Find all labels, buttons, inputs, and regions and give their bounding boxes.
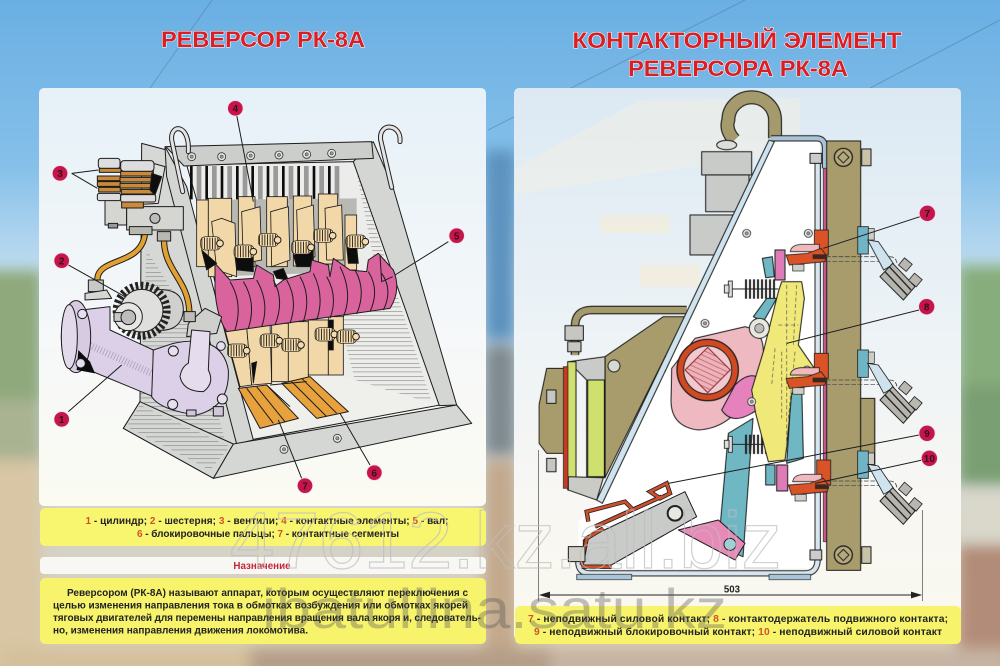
label 4: 4 [233,104,239,115]
label 6: 6 [372,468,378,479]
label 2 [54,253,69,268]
legend: reverser parts [40,508,486,546]
label 3: 3 [57,169,63,180]
label 7: 7 [302,481,308,492]
dimension: 503 [538,450,922,601]
heading: purpose: Назначение [233,561,291,572]
angled plate edge [597,140,774,503]
cable lugs [826,227,922,524]
title: contactor element: РЕВЕРСОРА РК-8А [628,56,848,81]
gear [114,286,183,335]
icon: right hook [380,127,400,187]
channel bracket [577,138,827,580]
text block: purpose description: но, изменения направления движения локомотива. [53,626,308,636]
olive mounting bar [810,141,875,570]
valves [97,158,183,241]
yellow contact holder [748,282,817,462]
label 5: 5 [454,231,460,242]
leader lines [68,115,448,478]
panel: contactor diagram background [514,88,961,640]
watermark: 47612.kz.all.biz: 47612.kz.all.biz [230,496,781,585]
label 7 [297,478,313,493]
label 2: 2 [59,256,65,267]
lower arm with blocking contact [568,483,745,567]
contact elements, lower row [225,317,359,387]
text block: purpose description: целью изменения направления тока в обмотках возбуждения или обмотках якорей [53,600,468,612]
label 7 [919,205,935,221]
contact elements, upper row [197,194,358,280]
shaft with cams [215,253,397,332]
text block: purpose description: Реверсором (РК-8А) называют аппарат, которым осуществляют переключения с [67,588,468,599]
icon: left hook [172,129,188,192]
label 9 [919,425,935,441]
label 4 [228,101,243,116]
blocking fingers [238,377,348,428]
cylinder [61,280,228,416]
label 3 [52,166,68,181]
label 7: 7 [925,209,931,220]
illustration: contactor element [538,97,937,601]
title: contactor element: КОНТАКТОРНЫЙ ЭЛЕМЕНТ [572,28,902,53]
label 10: 10 [924,454,935,465]
legend: contactor parts: 9 - неподвижный блокировочный контакт; 10 - неподвижный силовой контакт [534,626,942,638]
text block: purpose description [40,578,486,644]
spring lower [724,436,778,452]
pipes to valves [97,233,189,312]
dimension: 503: 503 [724,585,741,596]
label 5 [449,228,464,243]
leader lines [668,217,922,483]
legend: contactor parts [515,606,961,644]
label 8 [919,299,935,315]
frame: body of the apparatus [123,142,472,478]
contact springs [201,229,369,258]
gray blocks behind the plate [690,140,752,255]
fixed contacts [786,230,831,501]
label 1: 1 [59,415,65,426]
cam: pink segment and shaft ring [671,327,764,430]
title: contactor element [572,28,902,81]
spring upper [724,281,778,297]
plate rivets [701,229,812,327]
teal levers and contact plates [718,250,803,557]
label 9: 9 [924,429,930,440]
white mounting plate [578,142,820,570]
panel: reverser diagram background [39,88,486,506]
label 8: 8 [924,302,930,313]
legend: reverser parts: 1 - цилиндр; 2 - шестерня; 3 - вентили; 4 - контактные элементы; 5 - вал; [86,516,448,527]
label 10 [921,450,937,466]
label 1 [54,412,69,427]
legend: reverser parts: 6 - блокировочные пальцы; 7 - контактные сегменты [137,528,399,540]
title: reverser: РЕВЕРСОР РК-8А [161,27,365,52]
legend: contactor parts: 7 - неподвижный силовой контакт; 8 - контактодержатель подвижного контакта; [528,614,948,625]
icon: hook [727,97,775,140]
heading: purpose [40,557,486,574]
olive side assembly [539,310,687,500]
illustration: reverser RK-8A [52,101,472,493]
watermark: satu.kz: ibatullina.satu.kz [262,577,727,640]
label 6 [367,465,382,480]
text block: purpose description: тяговых двигателей для перемены направления вращения вала якоря и, следователь- [53,613,481,624]
